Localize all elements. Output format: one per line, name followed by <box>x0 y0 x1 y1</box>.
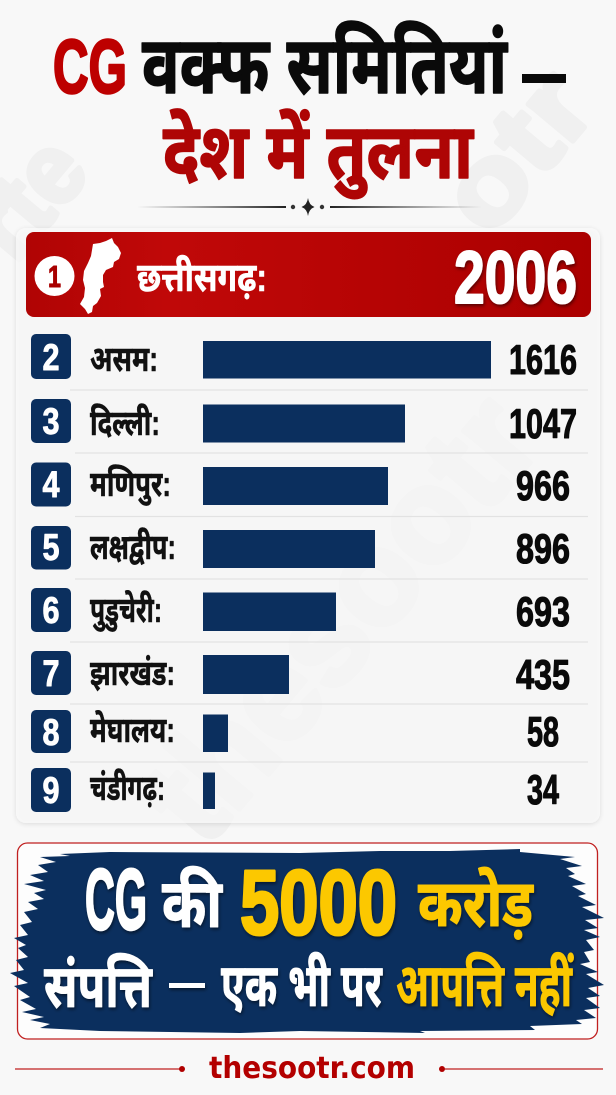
watermark: thesootr <box>112 366 568 869</box>
row 9 <box>31 766 559 813</box>
row 8: 58 <box>527 708 559 755</box>
row 2: असम: <box>90 340 158 379</box>
row 4: 4 <box>42 464 60 505</box>
row 3 <box>31 399 577 447</box>
row 4 <box>31 462 570 509</box>
title divider <box>137 198 482 216</box>
row 2: 1616 <box>509 336 577 383</box>
row 6: 693 <box>516 588 570 635</box>
title <box>53 21 566 199</box>
row 9: चंडीगढ़: <box>90 768 165 808</box>
callout line 2 <box>44 952 574 1020</box>
row 5: 5 <box>42 527 60 568</box>
row 1: Chhattisgarh highlight <box>26 232 591 319</box>
watermark: otr <box>414 46 616 255</box>
state label: छत्तीसगढ़: <box>137 255 267 300</box>
row 7: 435 <box>516 651 570 698</box>
footer: website: thesootr.com <box>209 1051 415 1086</box>
callout line 1: की <box>162 866 224 942</box>
callout line 1: 5000 <box>240 852 397 954</box>
callout line 1: CG <box>85 852 147 948</box>
row 5 <box>31 525 570 572</box>
row 2 <box>31 334 577 383</box>
watermark <box>0 46 616 869</box>
brush stroke background <box>10 849 604 1033</box>
row 6: 6 <box>42 590 60 631</box>
callout: 5000 crore property <box>10 843 604 1039</box>
title: CG <box>53 25 127 110</box>
row 8: मेघालय: <box>90 710 175 750</box>
row 3: 1047 <box>509 400 577 447</box>
callout line 1 <box>85 852 534 954</box>
row 3: दिल्ली: <box>90 403 160 443</box>
row 7 <box>31 651 570 698</box>
row 9: 9 <box>42 770 60 811</box>
callout border <box>18 843 598 1039</box>
row 8 <box>31 708 559 755</box>
row 2: 2 <box>42 337 60 378</box>
rank badge 1 <box>34 256 74 296</box>
row 3: 3 <box>42 401 60 442</box>
callout line 2: एक भी पर <box>221 952 383 1019</box>
row 7: 7 <box>42 653 60 694</box>
row 9: 34 <box>527 766 559 813</box>
row 6 <box>31 588 570 635</box>
callout line 1: करोड़ <box>418 866 534 940</box>
row 8: 8 <box>42 712 60 753</box>
callout line 2: संपत्ति <box>44 953 153 1020</box>
row 4: मणिपुर: <box>90 464 171 506</box>
rank badge 1: 1 <box>48 259 61 294</box>
title: देश में तुलना <box>163 109 474 199</box>
title: वक्फ समितियां <box>142 21 508 110</box>
footer: website <box>15 1051 603 1086</box>
row 5: लक्षद्वीप: <box>90 527 176 567</box>
row 6: पुडुचेरी: <box>90 590 162 632</box>
row dividers <box>70 390 588 762</box>
row 7: झारखंड: <box>90 654 175 693</box>
value: 2006 <box>454 236 577 319</box>
row 4: 966 <box>516 462 570 509</box>
icon: Chhattisgarh map <box>80 238 121 314</box>
row 5: 896 <box>516 525 570 572</box>
panel: ranking card <box>16 228 600 823</box>
